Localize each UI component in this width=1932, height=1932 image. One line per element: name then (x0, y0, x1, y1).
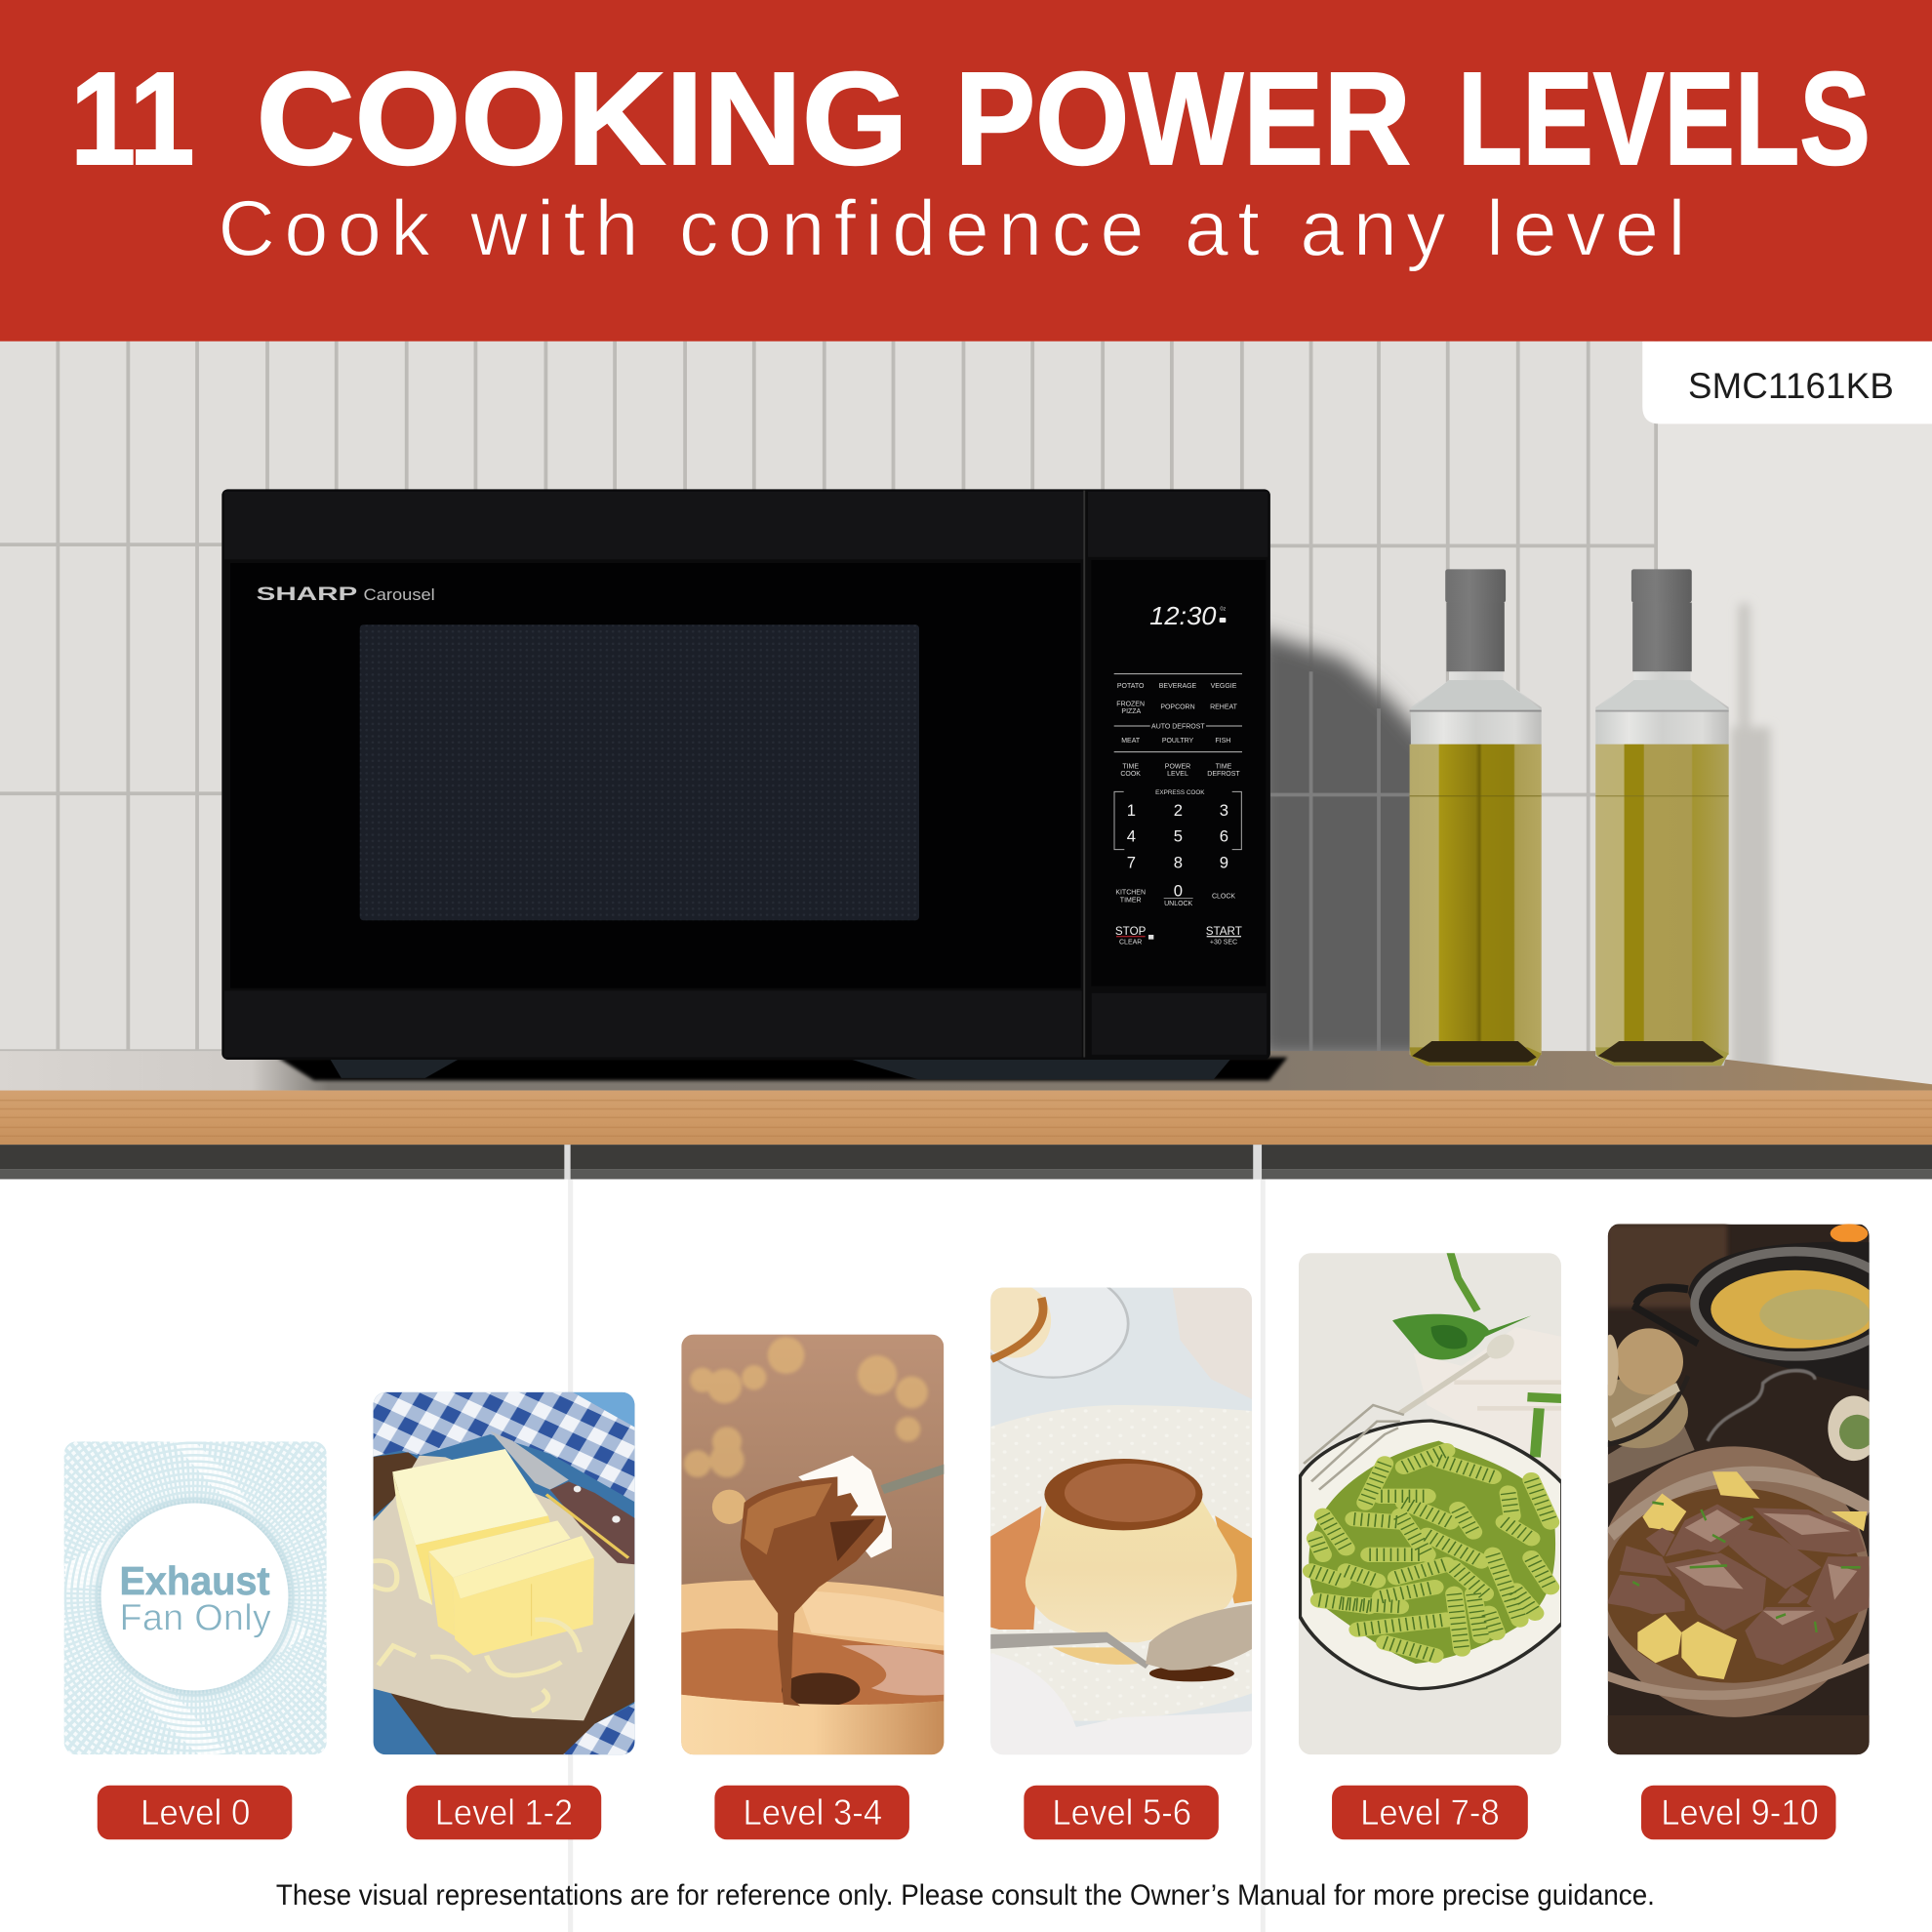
disclaimer: These visual representations are for reference only. Please consult the Owner’s Manual for more precise guidance. (276, 1879, 1655, 1912)
control panel: 2 (1174, 801, 1183, 820)
label (1641, 1786, 1836, 1839)
control panel: AUTO DEFROST (1151, 724, 1205, 731)
control panel: MEAT (1121, 738, 1141, 745)
bottle 2 (1595, 569, 1729, 1066)
flan image (990, 1288, 1252, 1754)
countertop (0, 1051, 1932, 1179)
control panel: 6 (1220, 827, 1228, 846)
level 5-6 card (978, 1270, 1258, 1839)
control panel: 0 (1174, 881, 1183, 900)
logo: Carousel (364, 586, 435, 604)
control panel: DEFROST (1207, 771, 1240, 778)
control panel: 8 (1174, 853, 1183, 871)
control panel: 5 (1174, 827, 1183, 846)
microwave (221, 489, 1288, 1080)
control panel: VEGGIE (1211, 683, 1237, 690)
control panel: POULTRY (1162, 738, 1194, 745)
level 3-4 card (681, 1335, 946, 1839)
control panel: KITCHEN (1115, 890, 1146, 897)
level 7-8 card (1296, 1249, 1566, 1839)
control panel: CLEAR (1119, 940, 1142, 946)
level 0 card (64, 1441, 327, 1840)
control panel: TIME (1122, 763, 1139, 770)
control panel: 4 (1127, 827, 1136, 846)
control panel: COOK (1120, 771, 1141, 778)
control panel: STOP (1115, 925, 1147, 938)
model tag: SMC1161KB (1688, 366, 1894, 406)
control panel: 9 (1220, 853, 1228, 871)
control panel: EXPRESS COOK (1155, 789, 1205, 796)
level 9-10 card (1608, 1224, 1870, 1840)
label (1024, 1786, 1219, 1839)
bottle 1 (1410, 569, 1542, 1066)
label (1332, 1786, 1528, 1839)
title: COOKING (257, 45, 908, 192)
title: 11 (70, 45, 195, 192)
control panel: +30 SEC (1210, 940, 1237, 946)
control panel: 3 (1220, 801, 1228, 820)
control panel: TIME (1216, 763, 1232, 770)
beef stew image (1608, 1224, 1870, 1754)
feet (329, 1057, 1232, 1079)
control panel: FISH (1215, 738, 1230, 745)
label: Level 9-10 (1661, 1792, 1819, 1832)
control panel: CLOCK (1212, 894, 1235, 901)
level 1-2 card (371, 1392, 636, 1839)
bottle shadow on wall (1731, 604, 1771, 1078)
control panel: START (1206, 925, 1242, 938)
control panel: POPCORN (1160, 704, 1195, 711)
control panel: 1 (1127, 801, 1136, 820)
label (98, 1786, 292, 1839)
butter image (371, 1392, 636, 1756)
control panel: 12:30 (1149, 601, 1217, 630)
control panel: POWER (1165, 763, 1190, 770)
control panel: REHEAT (1210, 704, 1238, 711)
control panel: UNLOCK (1164, 901, 1193, 907)
model tag (1642, 342, 1932, 423)
label: Level 7-8 (1360, 1792, 1500, 1832)
microwave shadow on tiles (1257, 631, 1467, 1060)
label: Level 0 (141, 1792, 250, 1832)
title (70, 45, 1871, 192)
control panel: 7 (1127, 853, 1136, 871)
label (714, 1786, 909, 1839)
control panel: PIZZA (1121, 708, 1142, 715)
logo (257, 584, 435, 605)
pasta image (1296, 1249, 1566, 1756)
control panel (1091, 560, 1266, 986)
subtitle: Cook with confidence at any level (219, 184, 1685, 272)
kitchen scene background (0, 342, 1932, 1093)
header banner (0, 0, 1932, 342)
white lower panel (0, 1179, 1932, 1932)
control panel: POTATO (1117, 683, 1145, 690)
logo: SHARP (257, 584, 357, 605)
melted chocolate image (681, 1335, 946, 1756)
control panel: 0z (1220, 607, 1226, 613)
control panel: FROZEN (1116, 701, 1145, 707)
control panel: LEVEL (1167, 771, 1188, 778)
control panel: TIMER (1120, 897, 1142, 904)
control panel: BEVERAGE (1159, 683, 1197, 690)
exhaust fan image: Exhaust (119, 1558, 270, 1603)
label: Level 3-4 (743, 1792, 882, 1832)
olive oil bottles (1410, 569, 1729, 1066)
door window (360, 624, 919, 920)
exhaust fan image: Fan Only (119, 1598, 271, 1639)
label: Level 1-2 (435, 1792, 573, 1832)
label: Level 5-6 (1052, 1792, 1191, 1832)
label (407, 1786, 601, 1839)
under-unit shadow (277, 1057, 1288, 1080)
exhaust fan image (64, 1441, 327, 1754)
title: POWER (955, 45, 1411, 192)
